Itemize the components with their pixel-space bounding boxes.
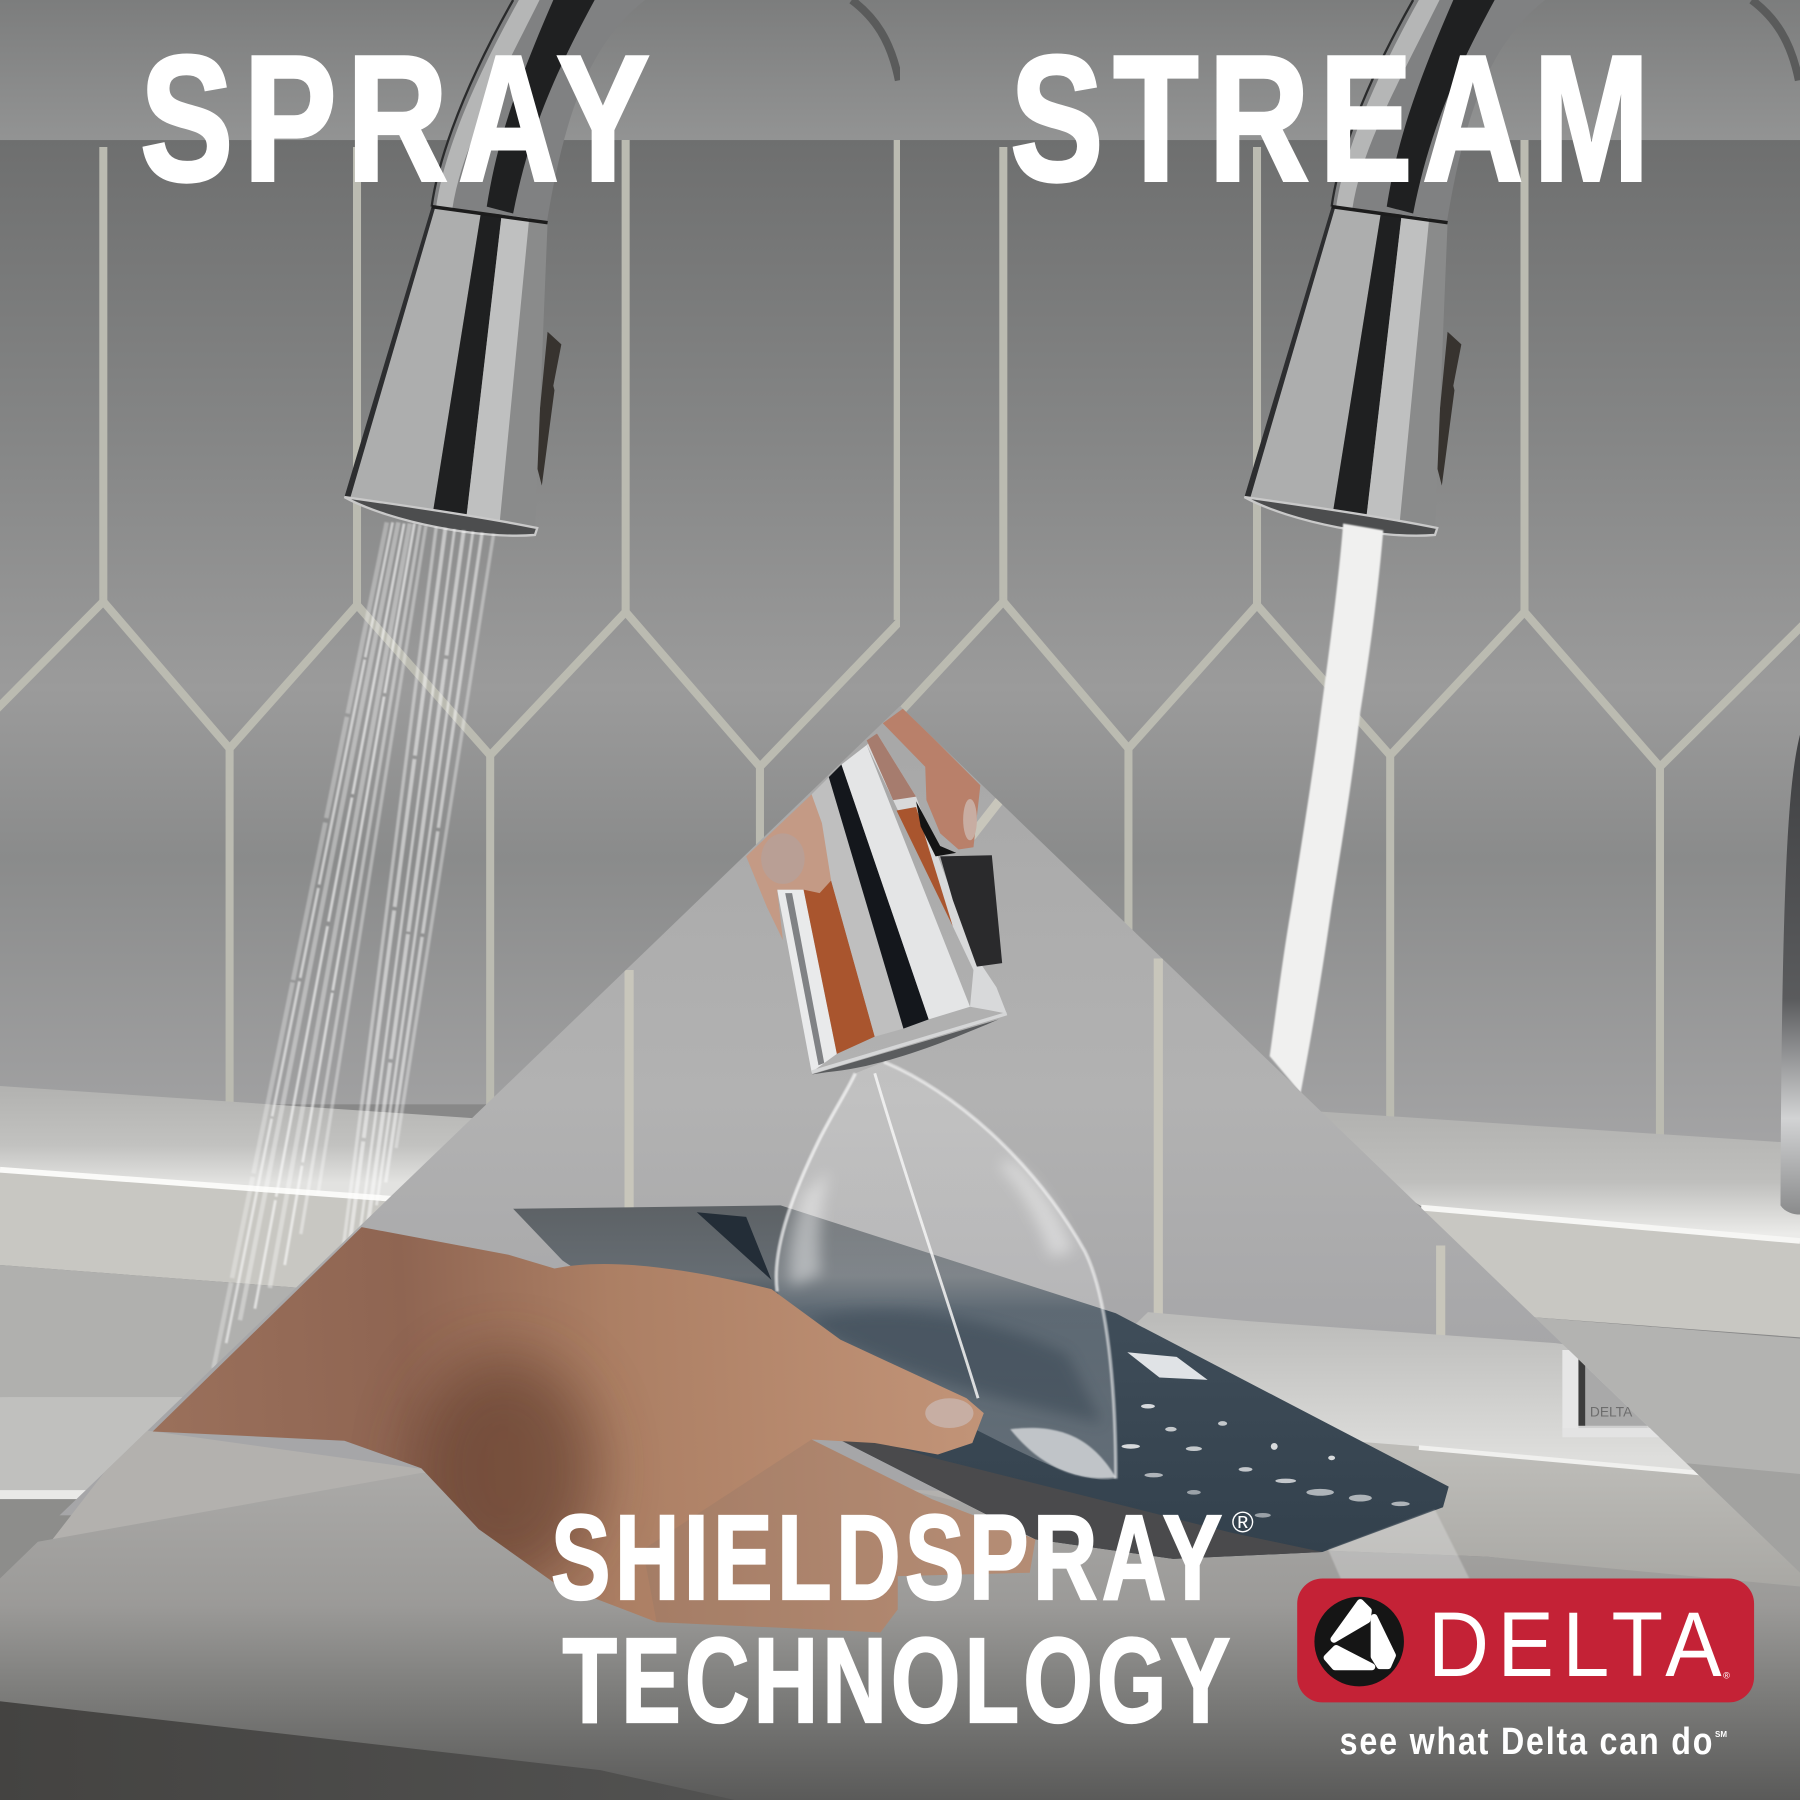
water spray	[214, 522, 494, 1368]
faucet head: tilted	[777, 734, 1007, 1074]
water drips	[1328, 1510, 1469, 1584]
counter: left surface	[53, 1431, 962, 1539]
faucet head: spray	[344, 207, 561, 536]
water stream	[1270, 523, 1383, 1093]
faucet arm: spray	[432, 0, 899, 225]
fingers	[746, 708, 980, 940]
water bell	[776, 1062, 1116, 1480]
counter: front stone	[1327, 1442, 1800, 1586]
panel: spray	[0, 0, 901, 1580]
counter: foreground gradient	[0, 1473, 1800, 1800]
logo: delta: ®	[1723, 1670, 1730, 1680]
logo: delta	[1297, 1578, 1754, 1702]
water sparkles	[1122, 1404, 1410, 1518]
heading: shieldspray technology	[551, 1491, 1254, 1748]
heading: shieldspray technology: ®	[1232, 1507, 1254, 1540]
panel: shieldspray scene	[0, 689, 1800, 1800]
heading: shieldspray technology: SHIELDSPRAY	[551, 1491, 1222, 1625]
faucet base: DELTA	[1590, 1405, 1633, 1420]
faucet arm: stream	[1332, 0, 1799, 225]
heading: shieldspray technology: TECHNOLOGY	[562, 1614, 1230, 1748]
logo: delta: DELTA	[1428, 1593, 1722, 1696]
heading: stream: STREAM	[1010, 20, 1650, 219]
counter: back surface	[1136, 1312, 1704, 1480]
faucet head: stream	[1244, 207, 1461, 536]
faucet base	[1562, 1350, 1666, 1437]
counter: dark front edge	[0, 1701, 735, 1800]
tagline: SM	[1715, 1730, 1727, 1739]
plate	[513, 1205, 1449, 1559]
heading: spray: SPRAY	[140, 20, 650, 219]
panel: stream	[895, 0, 1800, 1584]
icon: delta triangle	[1314, 1597, 1404, 1686]
faucet body at right edge	[1780, 735, 1800, 1215]
tagline: see what Delta can do	[1340, 1721, 1712, 1763]
hand	[153, 1227, 1035, 1632]
